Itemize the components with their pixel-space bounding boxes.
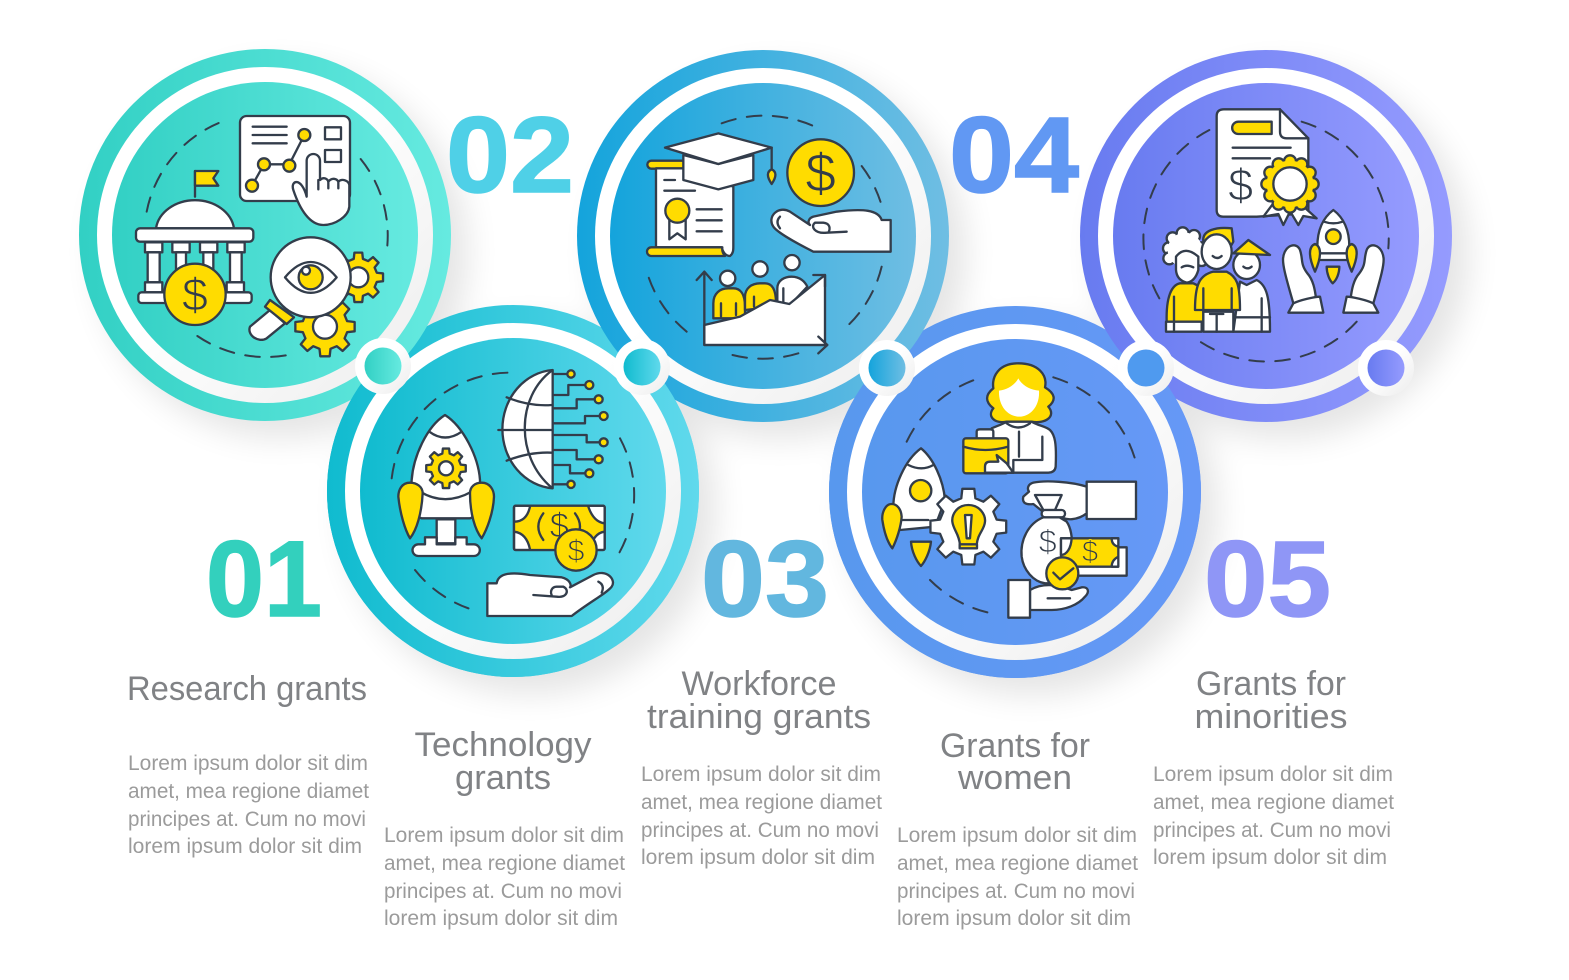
panel: circle 2 technology base	[327, 305, 699, 677]
heading: grants for women: Grants for	[940, 727, 1090, 765]
heading: grants for minorities: Grants for	[1196, 665, 1346, 703]
icon: hands exchanging money bag	[1008, 481, 1136, 618]
number 04: 04	[949, 94, 1079, 215]
number 02: 02	[446, 94, 574, 215]
icon: grants for minorities	[1143, 109, 1389, 361]
heading: grants for minorities	[1194, 665, 1348, 736]
heading: technology grants	[414, 726, 592, 797]
text block: technology grants description	[384, 824, 625, 930]
icon: hands exchanging money bag: $	[1039, 523, 1057, 560]
number 05: 05	[1204, 518, 1331, 639]
icon: team growth chart	[697, 255, 827, 353]
icon: grant document with seal: $	[1228, 160, 1253, 211]
icon: banknote with coin: $	[550, 506, 569, 545]
icon: government building with coin	[136, 171, 253, 325]
text block: workforce training grants description: Lorem ipsum dolor sit dim	[641, 763, 881, 786]
panel: circle 3 workforce base	[577, 50, 949, 422]
text block: technology grants description: amet, mea regione diamet	[384, 852, 625, 875]
icon: businesswoman with briefcase	[963, 363, 1056, 473]
connector dot 4	[1118, 340, 1174, 396]
icon: banknote with coin	[514, 506, 605, 571]
heading: technology grants: Technology	[414, 726, 592, 764]
text block: grants for women description: amet, mea regione diamet	[897, 852, 1138, 875]
heading: research grants: Research grants	[127, 670, 367, 708]
heading: grants for women: women	[957, 759, 1072, 797]
text block: research grants description: lorem ipsum dolor sit dim	[128, 835, 362, 858]
icon: diverse group of people	[1163, 227, 1270, 332]
icon: technology grants	[392, 370, 634, 616]
connector dot 1	[355, 338, 411, 394]
icon: banknote with coin: $	[567, 534, 585, 568]
text block: grants for women description: lorem ipsum dolor sit dim	[897, 907, 1131, 930]
text block: research grants description: Lorem ipsum dolor sit dim	[128, 752, 368, 775]
icon: hand with coin: $	[805, 142, 836, 204]
icon: hands exchanging money bag: $	[1082, 536, 1098, 569]
heading: workforce training grants: Workforce	[682, 665, 836, 703]
connector dot 3	[859, 340, 915, 396]
number 01: 01	[206, 518, 322, 639]
text block: workforce training grants description: lorem ipsum dolor sit dim	[641, 846, 875, 869]
text block: grants for minorities description: principes at. Cum no movi	[1153, 819, 1391, 842]
connector dot 5	[1358, 340, 1414, 396]
connector dot 2	[614, 339, 670, 395]
icon: workforce training grants	[647, 116, 891, 359]
text block: workforce training grants description: principes at. Cum no movi	[641, 819, 879, 842]
text block: grants for minorities description: lorem ipsum dolor sit dim	[1153, 846, 1387, 869]
icon: grants for women	[882, 363, 1137, 618]
text block: workforce training grants description: amet, mea regione diamet	[641, 791, 882, 814]
icon: grant document with seal	[1217, 109, 1319, 225]
text block: grants for women description: principes at. Cum no movi	[897, 880, 1135, 903]
icon: analytics board with pointing hand	[240, 116, 350, 225]
text block: research grants description: amet, mea regione diamet	[128, 780, 369, 803]
text block: grants for women description	[897, 824, 1138, 930]
icon: hands holding rocket	[1283, 210, 1384, 313]
icon: hand with coin	[771, 139, 891, 252]
heading: workforce training grants: training grants	[647, 698, 871, 736]
panel: circle 4 women base	[829, 306, 1201, 678]
icon: magnifier with eye and gears	[249, 237, 383, 356]
icon: rocket with lightbulb gear	[882, 448, 1006, 566]
panel: circle 1 research base	[79, 49, 451, 421]
text block: grants for women description: Lorem ipsum dolor sit dim	[897, 824, 1137, 847]
heading: technology grants: grants	[455, 759, 551, 797]
heading: workforce training grants	[647, 665, 871, 736]
text block: technology grants description: lorem ipsum dolor sit dim	[384, 907, 618, 930]
text block: research grants description	[128, 752, 369, 858]
heading: grants for minorities: minorities	[1194, 698, 1348, 736]
text block: grants for minorities description: amet, mea regione diamet	[1153, 791, 1394, 814]
heading: grants for women	[940, 727, 1090, 797]
text block: technology grants description: principes at. Cum no movi	[384, 880, 622, 903]
panel: circle 5 minorities base	[1080, 50, 1452, 422]
number 03: 03	[701, 518, 829, 639]
icon: digital globe	[498, 370, 608, 488]
icon: open hand	[487, 573, 613, 616]
icon: diploma scroll and graduation cap	[647, 133, 775, 256]
text block: grants for minorities description	[1153, 763, 1394, 869]
text block: workforce training grants description	[641, 763, 882, 869]
icon: government building with coin: $	[182, 269, 208, 321]
icon: research grants	[136, 116, 388, 357]
text block: grants for minorities description: Lorem ipsum dolor sit dim	[1153, 763, 1393, 786]
text block: research grants description: principes at. Cum no movi	[128, 808, 366, 831]
text block: technology grants description: Lorem ipsum dolor sit dim	[384, 824, 624, 847]
icon: rocket with gear	[398, 415, 494, 556]
